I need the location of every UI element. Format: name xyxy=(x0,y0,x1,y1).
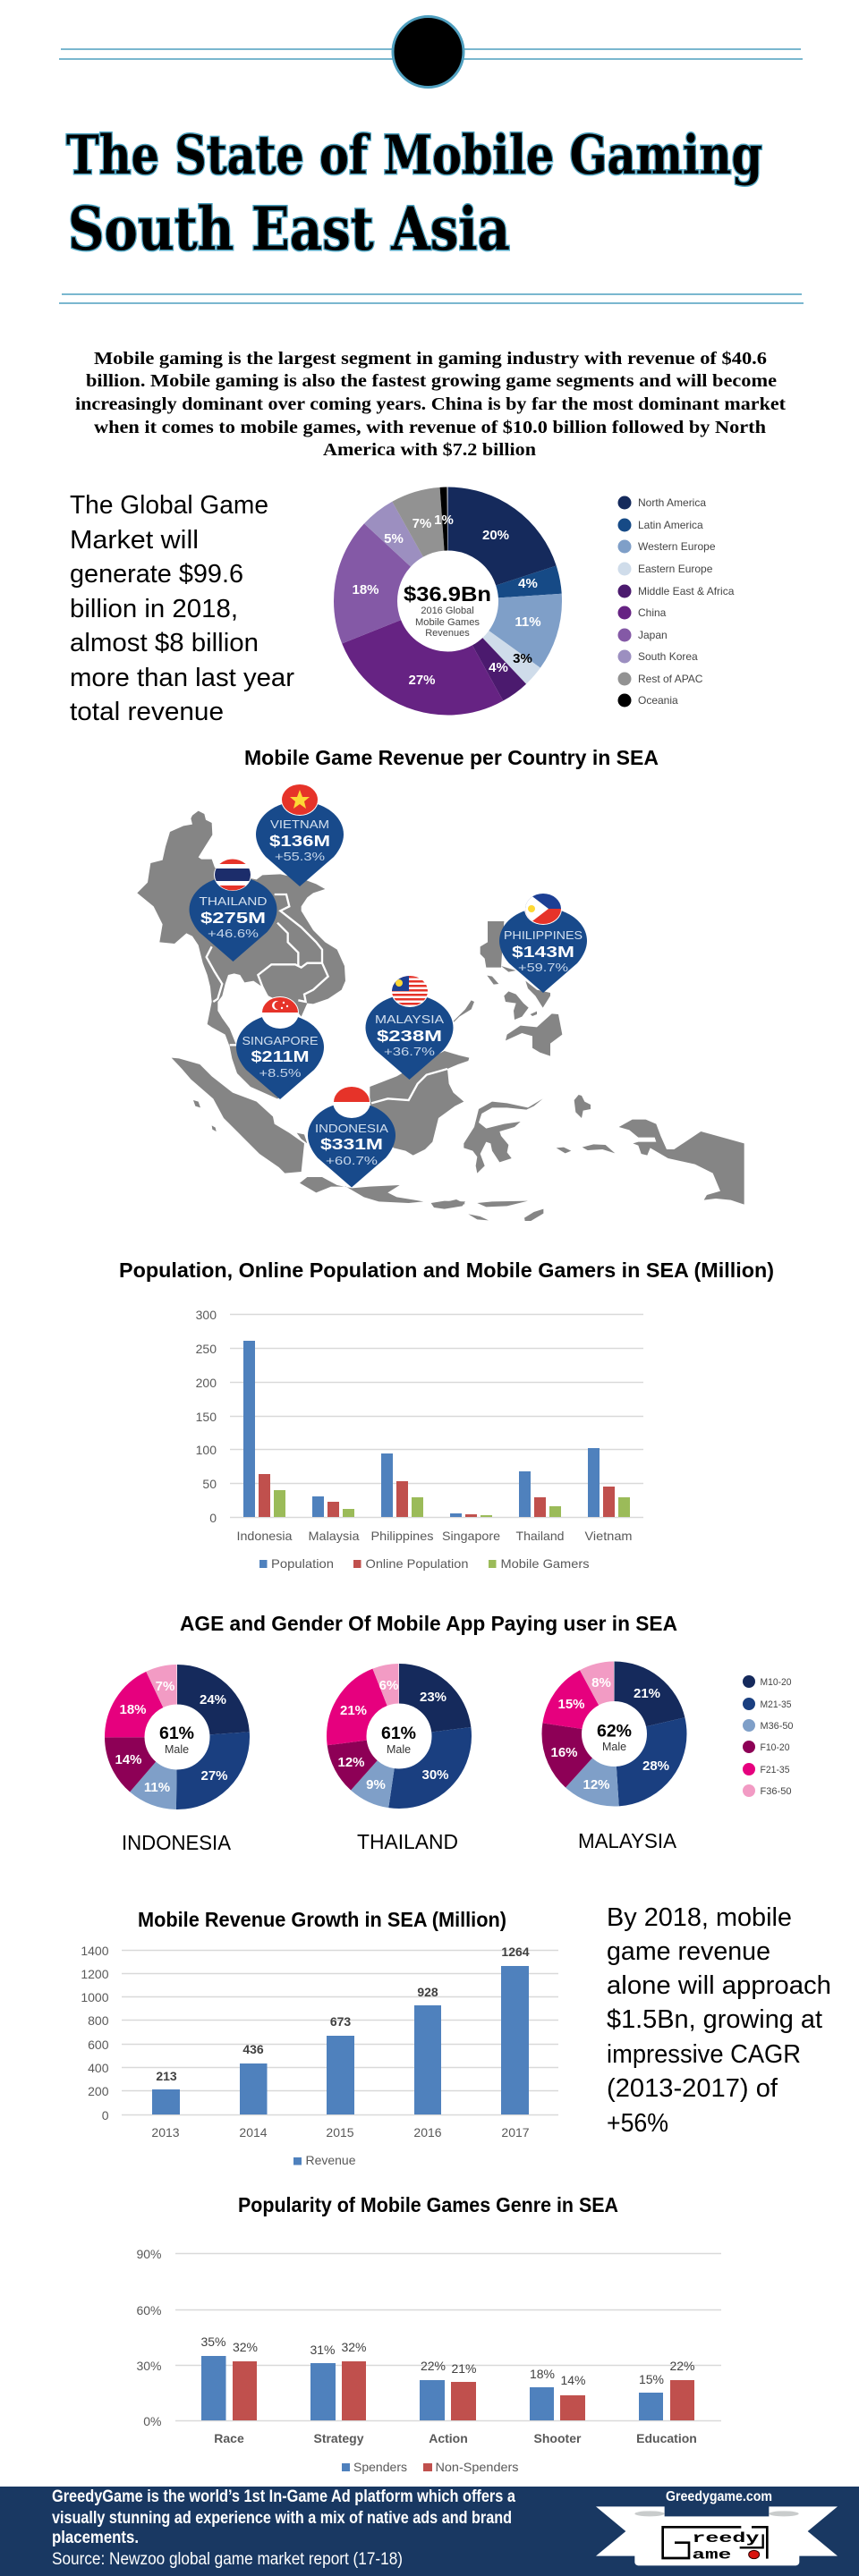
bar chart: genre popularity: 21% xyxy=(451,2361,477,2376)
footer description: GreedyGame is the world’s 1st In-Game Ad platform which offers a xyxy=(52,2487,515,2506)
donut: Indonesia: 18% xyxy=(119,1702,147,1717)
age legend: F21-35 xyxy=(761,1765,789,1775)
donut legend: South Korea xyxy=(638,650,698,663)
bar chart: revenue growth: 2014 xyxy=(239,2125,268,2140)
donut legend: China xyxy=(638,606,667,619)
footer description: placements. xyxy=(52,2529,139,2547)
bar chart: population: 50 xyxy=(202,1477,217,1491)
bar chart: population: Population xyxy=(271,1556,334,1571)
bar chart: revenue growth: 2013 xyxy=(151,2125,180,2140)
donut chart: 2016 global mobile games revenues: 7% xyxy=(412,516,431,531)
text block: global game market: The Global Game xyxy=(70,491,268,520)
bar chart: population: 150 xyxy=(196,1410,217,1424)
donut legend: North America xyxy=(638,496,706,509)
donut: Thailand: 23% xyxy=(420,1690,447,1705)
donut: Malaysia: 21% xyxy=(634,1686,660,1701)
bar chart: population: Vietnam xyxy=(585,1529,632,1543)
text block: global game market: generate $99.6 xyxy=(70,560,243,589)
footer band xyxy=(0,2487,859,2576)
bar chart: genre popularity: Strategy xyxy=(313,2431,364,2445)
bar chart: revenue growth: 400 xyxy=(88,2061,109,2075)
age legend: M21-35 xyxy=(761,1699,791,1710)
donut legend xyxy=(617,496,735,707)
bar chart: population: Singapore xyxy=(442,1529,500,1543)
donut: Indonesia: Male xyxy=(165,1743,189,1756)
pin: Philippines: $143M xyxy=(512,943,574,961)
heading: revenue per country: Mobile Game Revenue per Country in SEA xyxy=(244,746,659,769)
donut: Indonesia: 7% xyxy=(156,1679,174,1694)
heading: genre popularity: Popularity of Mobile Games Genre in SEA xyxy=(238,2193,618,2216)
donut: Malaysia: Male xyxy=(602,1741,626,1753)
bar chart: revenue growth: Revenue xyxy=(306,2153,356,2167)
pin: Singapore: SINGAPORE xyxy=(242,1035,319,1047)
header ornament: lines and circle xyxy=(59,16,803,88)
pin: Indonesia xyxy=(308,1084,395,1188)
text block: 2018 projection: game revenue xyxy=(607,1937,770,1966)
title xyxy=(66,124,762,264)
pin: Singapore: $211M xyxy=(251,1047,310,1065)
text block: global game market: almost $8 billion xyxy=(70,629,259,657)
donut legend: Rest of APAC xyxy=(638,673,703,685)
heading: age and gender: AGE and Gender Of Mobile App Paying user in SEA xyxy=(180,1612,677,1635)
donut chart: 2016 global mobile games revenues: Revenues xyxy=(425,628,470,639)
text block: global game market xyxy=(70,491,294,726)
bar chart: revenue growth: 436 xyxy=(242,2042,264,2056)
pin: Thailand: +46.6% xyxy=(208,927,259,940)
pin: Thailand xyxy=(190,854,277,962)
bar chart: genre popularity: 18% xyxy=(530,2367,555,2381)
pin: Vietnam: +55.3% xyxy=(275,850,326,863)
text block: 2018 projection: +56% xyxy=(607,2109,668,2138)
bar chart: genre popularity xyxy=(136,2247,721,2474)
intro paragraph: billion. Mobile gaming is also the fastest growing game segments and will become xyxy=(86,371,777,391)
bar chart: population: 250 xyxy=(196,1342,217,1356)
donut: Indonesia xyxy=(115,1679,230,1795)
donut: Indonesia: 24% xyxy=(200,1692,226,1707)
footer description xyxy=(52,2487,515,2569)
donut: Thailand: 12% xyxy=(337,1755,365,1770)
bar chart: revenue growth: 673 xyxy=(330,2014,351,2029)
logo ribbon xyxy=(596,2506,838,2565)
title lower divider xyxy=(59,294,804,303)
bar chart: population: Online Population xyxy=(365,1556,469,1571)
bar chart: genre popularity: Action xyxy=(429,2431,468,2445)
donut: Thailand: 30% xyxy=(421,1767,449,1783)
bar chart: population: Malaysia xyxy=(308,1529,360,1543)
bar chart: revenue growth: 200 xyxy=(88,2084,109,2098)
bar chart: genre popularity: Education xyxy=(636,2431,697,2445)
donut chart: 2016 global mobile games revenues: $36.9Bn xyxy=(404,582,491,606)
donut chart: 2016 global mobile games revenues: 18% xyxy=(352,582,379,597)
donut: Malaysia xyxy=(550,1675,669,1792)
pin: Malaysia xyxy=(365,973,453,1080)
donut legend: Latin America xyxy=(638,519,703,531)
bar chart: revenue growth: 213 xyxy=(156,2069,177,2083)
pin: Vietnam: $136M xyxy=(269,832,330,850)
bar chart: population: 100 xyxy=(196,1443,217,1457)
bar chart: revenue growth: 2015 xyxy=(326,2125,354,2140)
bar chart: genre popularity: 30% xyxy=(136,2359,161,2373)
pin: Singapore: +8.5% xyxy=(259,1066,302,1080)
pin: Philippines: PHILIPPINES xyxy=(504,929,583,942)
heading: revenue growth: Mobile Revenue Growth in SEA (Million) xyxy=(138,1908,506,1931)
text block: global game market: Market will xyxy=(70,526,199,555)
donut: Thailand xyxy=(337,1678,452,1792)
map: Sumatra, Java and Borneo xyxy=(172,1051,469,1209)
country labels: MALAYSIA xyxy=(578,1829,677,1852)
donut chart: 2016 global mobile games revenues: 5% xyxy=(384,531,404,547)
donut: Thailand: 61% xyxy=(381,1724,416,1743)
pin: Indonesia: +60.7% xyxy=(326,1154,378,1167)
text block: 2018 projection: $1.5Bn, growing at xyxy=(607,2005,822,2034)
country labels xyxy=(122,1829,677,1854)
bar chart: population: 200 xyxy=(196,1376,217,1390)
bar chart: genre popularity: 22% xyxy=(669,2359,695,2373)
intro paragraph: Mobile gaming is the largest segment in gaming industry with revenue of $40.6 xyxy=(94,349,767,369)
bar chart: genre popularity: 14% xyxy=(560,2373,586,2387)
bar chart: revenue growth: 2017 xyxy=(501,2125,530,2140)
donut chart: 2016 global mobile games revenues: 1% xyxy=(434,513,454,528)
text block: 2018 projection: (2013-2017) of xyxy=(607,2074,778,2103)
bar chart: genre popularity: 32% xyxy=(233,2340,258,2354)
bar chart: genre popularity: 90% xyxy=(136,2247,161,2261)
heading: population: Population, Online Population and Mobile Gamers in SEA (Million) xyxy=(119,1258,774,1282)
bar chart: genre popularity: Spenders xyxy=(353,2460,407,2474)
donut: Indonesia: 61% xyxy=(159,1724,194,1743)
pin: Malaysia: $238M xyxy=(377,1027,442,1045)
bar chart: genre popularity: Non-Spenders xyxy=(435,2460,519,2474)
bar chart: genre popularity: 22% xyxy=(421,2359,446,2373)
country labels: THAILAND xyxy=(357,1830,458,1853)
footer description: visually stunning ad experience with a mix of native ads and brand xyxy=(52,2509,512,2528)
donut chart: 2016 global mobile games revenues: 27% xyxy=(408,673,436,688)
donut: Indonesia: 27% xyxy=(200,1768,228,1784)
donut chart: 2016 global mobile games revenues xyxy=(352,513,541,688)
donut: Indonesia: 11% xyxy=(144,1780,170,1795)
donut legend: Oceania xyxy=(638,694,678,707)
pin: Philippines: +59.7% xyxy=(518,961,569,974)
footer description: Source: Newzoo global game market report (17-18) xyxy=(52,2550,403,2569)
bar chart: genre popularity: 31% xyxy=(310,2343,336,2357)
title: South East Asia xyxy=(68,194,510,264)
pin: Malaysia: MALAYSIA xyxy=(375,1013,445,1026)
pin: Thailand: THAILAND xyxy=(199,895,267,908)
donut chart: 2016 global mobile games revenues: 3% xyxy=(513,651,532,666)
text block: global game market: billion in 2018, xyxy=(70,595,238,623)
donut: Malaysia: 16% xyxy=(550,1745,578,1760)
logo ribbon: reedy xyxy=(692,2530,759,2546)
bar chart: population: 0 xyxy=(209,1511,217,1525)
bar chart: population: Philippines xyxy=(370,1529,433,1543)
bar chart: population: Indonesia xyxy=(236,1529,293,1543)
donut: Malaysia: 12% xyxy=(583,1777,610,1792)
donut: Indonesia: 14% xyxy=(115,1752,142,1767)
bar chart: population: Mobile Gamers xyxy=(501,1556,589,1571)
bar chart: revenue growth: 600 xyxy=(88,2038,109,2052)
donut: Thailand: 6% xyxy=(379,1678,398,1693)
footer site link: Greedygame.com xyxy=(666,2489,772,2504)
bar chart: population xyxy=(196,1308,643,1571)
intro paragraph: when it comes to mobile games, with revenue of $10.0 billion followed by North xyxy=(94,418,766,437)
map: eastern islands xyxy=(447,921,744,1221)
donut legend: Middle East & Africa xyxy=(638,585,735,597)
bar chart: population: Thailand xyxy=(515,1529,564,1543)
pin: Thailand: $275M xyxy=(200,909,266,927)
country labels: INDONESIA xyxy=(122,1831,232,1854)
pin: Singapore xyxy=(236,995,324,1099)
intro paragraph xyxy=(75,349,786,460)
intro paragraph: America with $7.2 billion xyxy=(323,440,536,460)
bar chart: genre popularity: Race xyxy=(214,2431,244,2445)
bar chart: revenue growth: 800 xyxy=(88,2013,109,2028)
bar chart: genre popularity: 15% xyxy=(639,2372,664,2386)
bar chart: genre popularity: Shooter xyxy=(534,2431,582,2445)
donut legend: Eastern Europe xyxy=(638,563,713,575)
age legend: M10-20 xyxy=(761,1677,791,1688)
pin: Indonesia: $331M xyxy=(320,1135,383,1153)
pin: Vietnam xyxy=(256,778,344,886)
donut chart: 2016 global mobile games revenues: 20% xyxy=(482,528,509,543)
donut: Malaysia: 62% xyxy=(597,1721,632,1741)
text block: global game market: more than last year xyxy=(70,664,294,692)
donut chart: 2016 global mobile games revenues: 11% xyxy=(515,614,541,630)
donut legend: Japan xyxy=(638,629,668,641)
donut legend: Western Europe xyxy=(638,540,716,553)
bar chart: revenue growth: 0 xyxy=(102,2108,109,2123)
donut: Thailand: 21% xyxy=(340,1703,367,1718)
donut chart: 2016 global mobile games revenues: 4% xyxy=(518,576,538,591)
bar chart: revenue growth: 1000 xyxy=(81,1990,109,2004)
bar chart: genre popularity: 60% xyxy=(136,2303,161,2318)
bar chart: genre popularity: 0% xyxy=(143,2414,161,2428)
text block: 2018 projection: impressive CAGR xyxy=(607,2040,801,2069)
map: mainland xyxy=(137,811,345,1098)
bar chart: genre popularity: 32% xyxy=(341,2340,367,2354)
map of south east asia xyxy=(137,811,744,1221)
pin: Philippines xyxy=(499,888,587,993)
pin: Indonesia: INDONESIA xyxy=(315,1123,389,1135)
donut chart: 2016 global mobile games revenues: Mobile Games xyxy=(415,617,481,628)
bar chart: genre popularity: 35% xyxy=(200,2334,226,2349)
donut: Malaysia: 28% xyxy=(642,1758,669,1774)
bar chart: revenue growth: 928 xyxy=(417,1985,438,1999)
bar chart: revenue growth: 1400 xyxy=(81,1944,109,1958)
donut: Malaysia: 15% xyxy=(557,1697,585,1712)
donut chart: 2016 global mobile games revenues: 2016 Global xyxy=(421,606,474,616)
intro paragraph: increasingly dominant over coming years. China is by far the most dominant market xyxy=(75,394,786,414)
donut chart: 2016 global mobile games revenues: 4% xyxy=(489,660,508,675)
bar chart: revenue growth: 1200 xyxy=(81,1967,109,1981)
logo ribbon: ame xyxy=(692,2546,731,2563)
bar chart: population: 300 xyxy=(196,1308,217,1322)
pin: Vietnam: VIETNAM xyxy=(270,818,329,831)
pin: Malaysia: +36.7% xyxy=(384,1045,436,1058)
bar chart: revenue growth: 2016 xyxy=(413,2125,442,2140)
donut: Thailand: 9% xyxy=(366,1777,386,1792)
bar chart: revenue growth: 1264 xyxy=(501,1945,530,1959)
text block: 2018 projection xyxy=(607,1903,831,2138)
age legend: F10-20 xyxy=(761,1742,789,1753)
donut: Thailand: Male xyxy=(387,1743,411,1756)
text block: 2018 projection: alone will approach xyxy=(607,1971,831,2000)
text block: global game market: total revenue xyxy=(70,698,224,726)
age legend xyxy=(743,1675,793,1797)
age legend: F36-50 xyxy=(761,1786,791,1797)
bar chart: revenue growth xyxy=(81,1944,558,2167)
age legend: M36-50 xyxy=(761,1721,793,1732)
text block: 2018 projection: By 2018, mobile xyxy=(607,1903,792,1932)
donut: Malaysia: 8% xyxy=(591,1675,611,1690)
